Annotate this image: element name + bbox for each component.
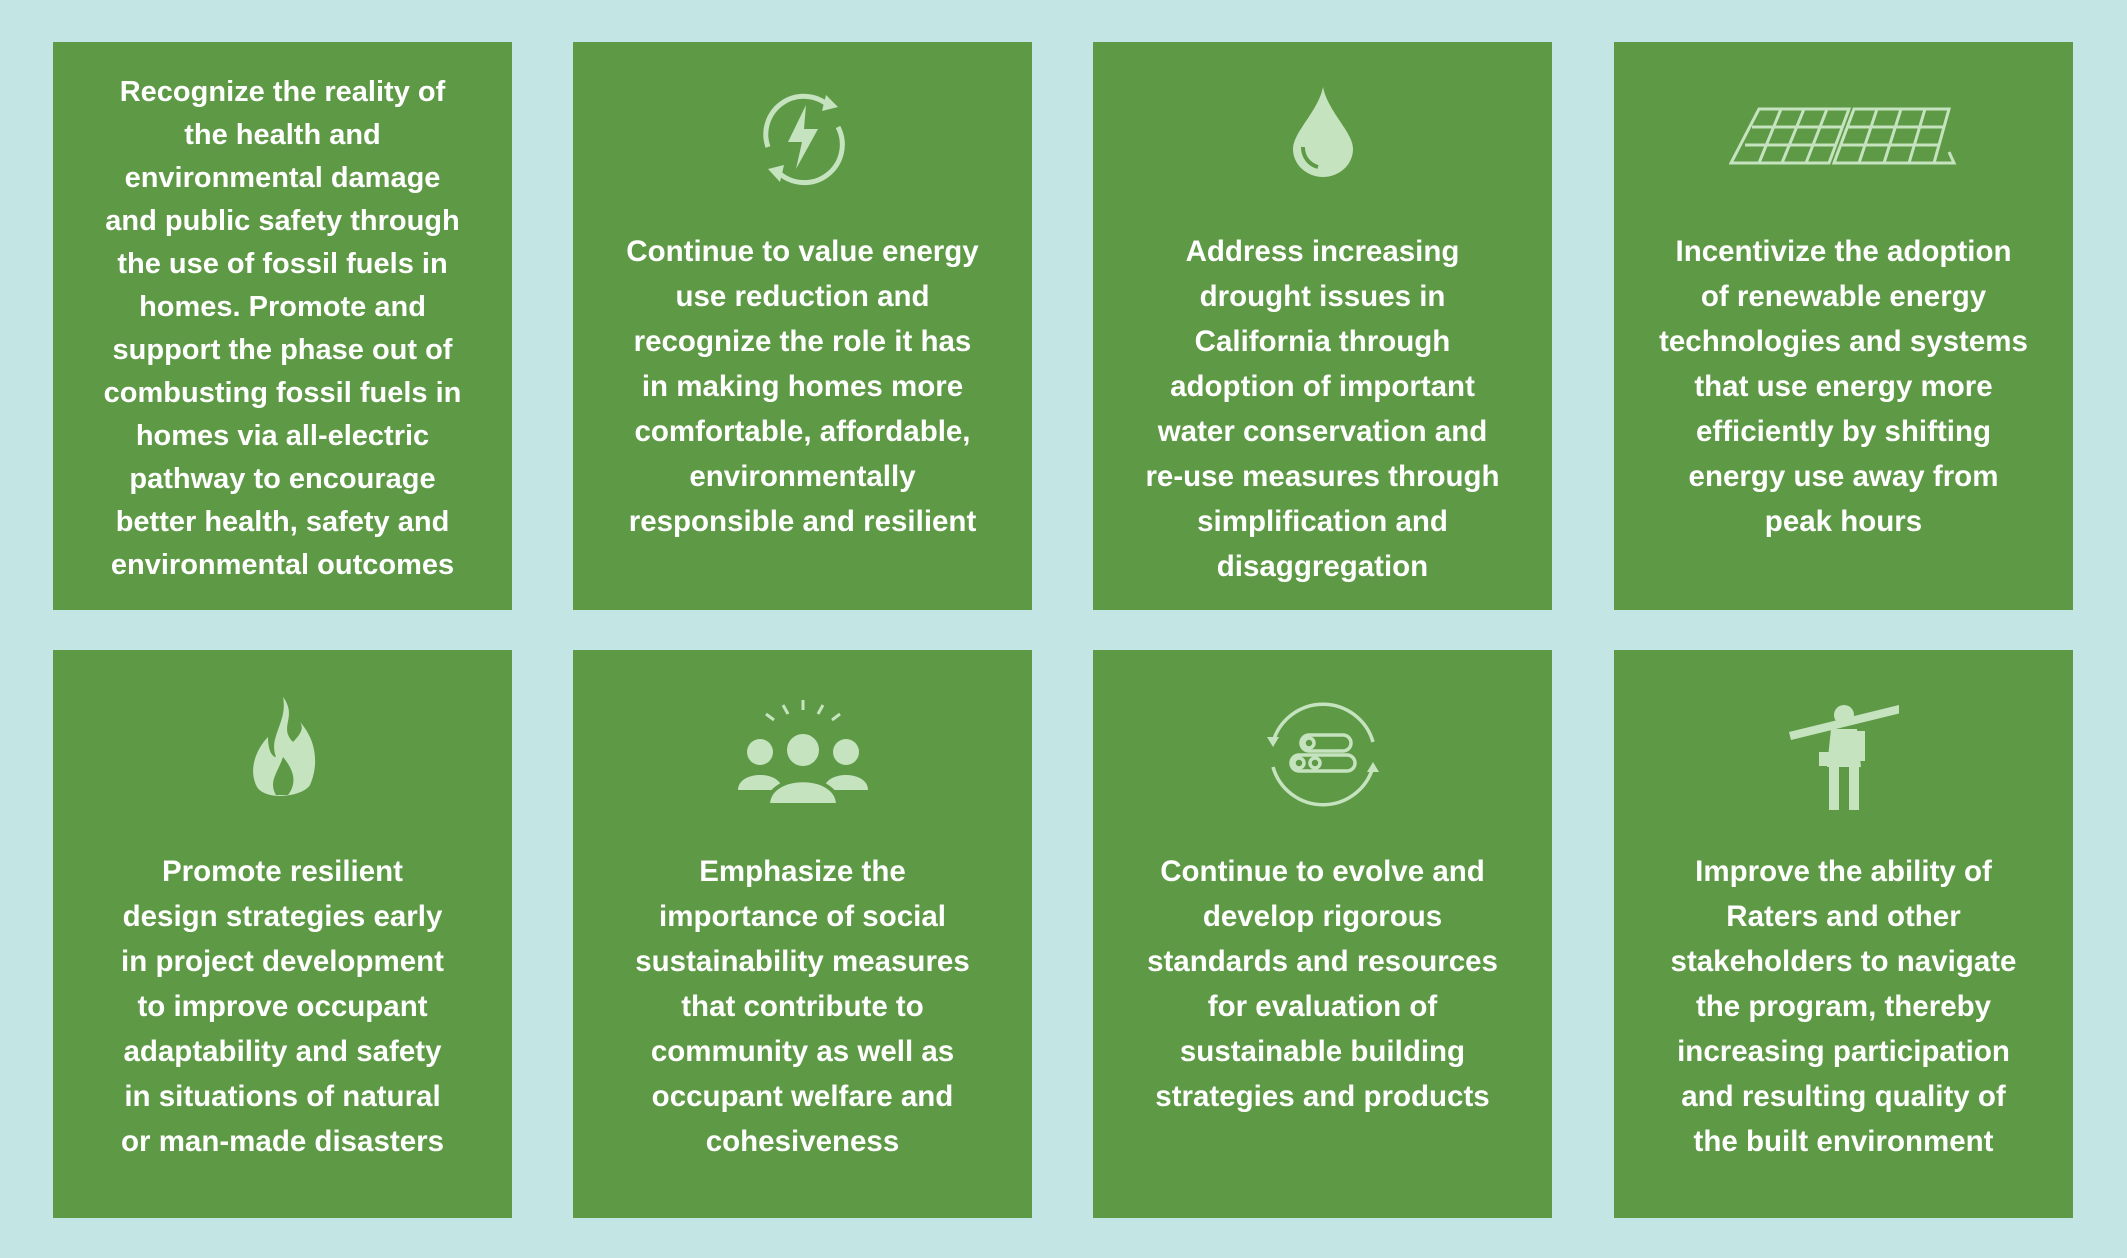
text: raters: increasing participation <box>1677 1035 2010 1068</box>
text: raters: Raters and other <box>1726 900 1961 933</box>
text: resilient design: in project development <box>121 945 444 978</box>
text: drought <box>1145 235 1500 583</box>
text: fossil fuels: and public safety through <box>105 205 460 237</box>
text: energy reduction: Continue to value energy <box>626 235 979 268</box>
text: raters: stakeholders to navigate <box>1671 945 2016 978</box>
text: raters: Improve the ability of <box>1695 855 1992 888</box>
text: fossil fuels: combusting fossil fuels in <box>104 377 461 409</box>
text: social sustainability: cohesiveness <box>706 1125 899 1158</box>
text: social sustainability: that contribute to <box>681 990 924 1023</box>
panel: standards <box>1093 650 1552 1218</box>
text: resilient design: design strategies early <box>123 900 442 933</box>
text: drought: simplification and <box>1197 505 1448 538</box>
text: fossil fuels: homes. Promote and <box>139 291 426 323</box>
text: fossil fuels <box>104 76 461 581</box>
text: fossil fuels: Recognize the reality of <box>120 76 445 108</box>
text: social sustainability <box>635 855 970 1158</box>
text: renewable: of renewable energy <box>1701 280 1986 313</box>
text: resilient design: to improve occupant <box>137 990 428 1023</box>
text: energy reduction: use reduction and <box>675 280 930 313</box>
icon: fire <box>253 697 316 796</box>
text: raters: the program, thereby <box>1696 990 1991 1023</box>
panel: social sustainability <box>573 650 1032 1218</box>
text: fossil fuels: better health, safety and <box>116 506 449 538</box>
text: social sustainability: Emphasize the <box>699 855 906 888</box>
text: resilient design <box>121 855 444 1158</box>
text: social sustainability: occupant welfare and <box>652 1080 953 1113</box>
text: standards <box>1147 855 1498 1113</box>
text: renewable: Incentivize the adoption <box>1676 235 2012 268</box>
icon: solar panels <box>1729 108 1956 164</box>
text: drought: California through <box>1195 325 1450 358</box>
text: renewable: efficiently by shifting <box>1696 415 1991 448</box>
panel: renewable <box>1614 42 2073 610</box>
text: resilient design: or man-made disasters <box>121 1125 444 1158</box>
text: fossil fuels: support the phase out of <box>113 334 452 366</box>
text: energy reduction: responsible and resilient <box>629 505 976 538</box>
text: drought: adoption of important <box>1170 370 1475 403</box>
text: drought: water conservation and <box>1158 415 1487 448</box>
text: standards: develop rigorous <box>1203 900 1442 933</box>
text: energy reduction <box>626 235 979 538</box>
text: raters: and resulting quality of <box>1681 1080 2006 1113</box>
text: energy reduction: in making homes more <box>642 370 963 403</box>
text: fossil fuels: pathway to encourage <box>129 463 436 495</box>
text: renewable: that use energy more <box>1694 370 1993 403</box>
panel: fossil fuels <box>53 42 512 610</box>
text: raters: the built environment <box>1694 1125 1993 1158</box>
text: standards: for evaluation of <box>1208 990 1437 1023</box>
text: raters <box>1671 855 2016 1158</box>
text: resilient design: adaptability and safety <box>123 1035 442 1068</box>
text: fossil fuels: the health and <box>184 119 381 151</box>
text: social sustainability: community as well as <box>651 1035 954 1068</box>
icon: people <box>738 700 868 803</box>
text: energy reduction: recognize the role it has <box>634 325 971 358</box>
text: energy reduction: environmentally <box>689 460 916 493</box>
text: fossil fuels: environmental damage <box>125 162 440 194</box>
panel: drought <box>1093 42 1552 610</box>
text: social sustainability: sustainability measures <box>635 945 970 978</box>
icon: energy cycle <box>763 94 845 186</box>
text: standards: strategies and products <box>1155 1080 1490 1113</box>
text: renewable: peak hours <box>1765 505 1922 538</box>
text: drought: disaggregation <box>1217 550 1428 583</box>
text: fossil fuels: homes via all-electric <box>136 420 429 452</box>
text: fossil fuels: environmental outcomes <box>111 549 454 581</box>
text: social sustainability: importance of social <box>659 900 946 933</box>
text: drought: Address increasing <box>1186 235 1459 268</box>
text: drought: re-use measures through <box>1145 460 1500 493</box>
panel: resilient design <box>53 650 512 1218</box>
text: standards: Continue to evolve and <box>1160 855 1485 888</box>
text: standards: sustainable building <box>1180 1035 1465 1068</box>
text: fossil fuels: the use of fossil fuels in <box>117 248 448 280</box>
icon: water drop <box>1293 87 1353 177</box>
text: renewable <box>1659 235 2028 538</box>
text: drought: drought issues in <box>1200 280 1445 313</box>
panel: raters <box>1614 650 2073 1218</box>
text: renewable: energy use away from <box>1689 460 1998 493</box>
text: standards: standards and resources <box>1147 945 1498 978</box>
text: resilient design: in situations of natural <box>124 1080 441 1113</box>
panel: energy reduction <box>573 42 1032 610</box>
text: energy reduction: comfortable, affordable, <box>634 415 971 448</box>
icon: recycled logs <box>1267 702 1379 806</box>
text: renewable: technologies and systems <box>1659 325 2028 358</box>
text: resilient design: Promote resilient <box>162 855 403 888</box>
icon: worker <box>1789 705 1899 810</box>
